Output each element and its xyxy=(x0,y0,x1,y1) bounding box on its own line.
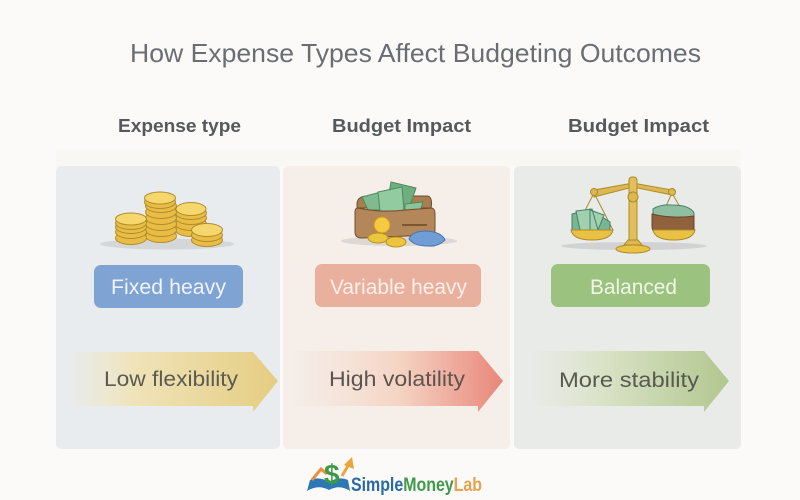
panel: variable heavy xyxy=(283,166,510,449)
icon: balance scale xyxy=(561,177,707,253)
wordmark: SimpleMoneyLab xyxy=(351,475,482,496)
label pill: balanced xyxy=(551,264,710,307)
panel: balanced xyxy=(514,166,741,449)
panel: fixed heavy xyxy=(56,166,280,449)
arrow: more stability: More stability xyxy=(559,369,700,392)
logo: SimpleMoneyLab xyxy=(307,457,482,496)
icon: book with dollar and arrow xyxy=(307,457,354,491)
arrow: high volatility xyxy=(295,351,503,412)
label pill: variable heavy xyxy=(315,264,481,307)
icon: wallet with cash xyxy=(341,182,457,247)
arrow: more stability xyxy=(535,351,729,412)
arrow: low flexibility xyxy=(72,352,278,412)
label pill: fixed heavy: Fixed heavy xyxy=(111,276,226,299)
label pill: fixed heavy xyxy=(94,265,243,308)
column heading: expense type: Expense type xyxy=(118,116,241,136)
column heading: budget impact second: Budget Impact xyxy=(568,116,709,136)
column heading: budget impact: Budget Impact xyxy=(332,116,471,136)
arrow: high volatility: High volatility xyxy=(329,368,466,391)
label pill: variable heavy: Variable heavy xyxy=(330,276,467,299)
title: How Expense Types Affect Budgeting Outcomes xyxy=(130,38,701,68)
label pill: balanced: Balanced xyxy=(590,276,677,299)
icon: book with dollar and arrow: $ xyxy=(324,459,340,490)
arrow: low flexibility: Low flexibility xyxy=(104,368,239,391)
icon: coin stacks xyxy=(100,192,234,250)
